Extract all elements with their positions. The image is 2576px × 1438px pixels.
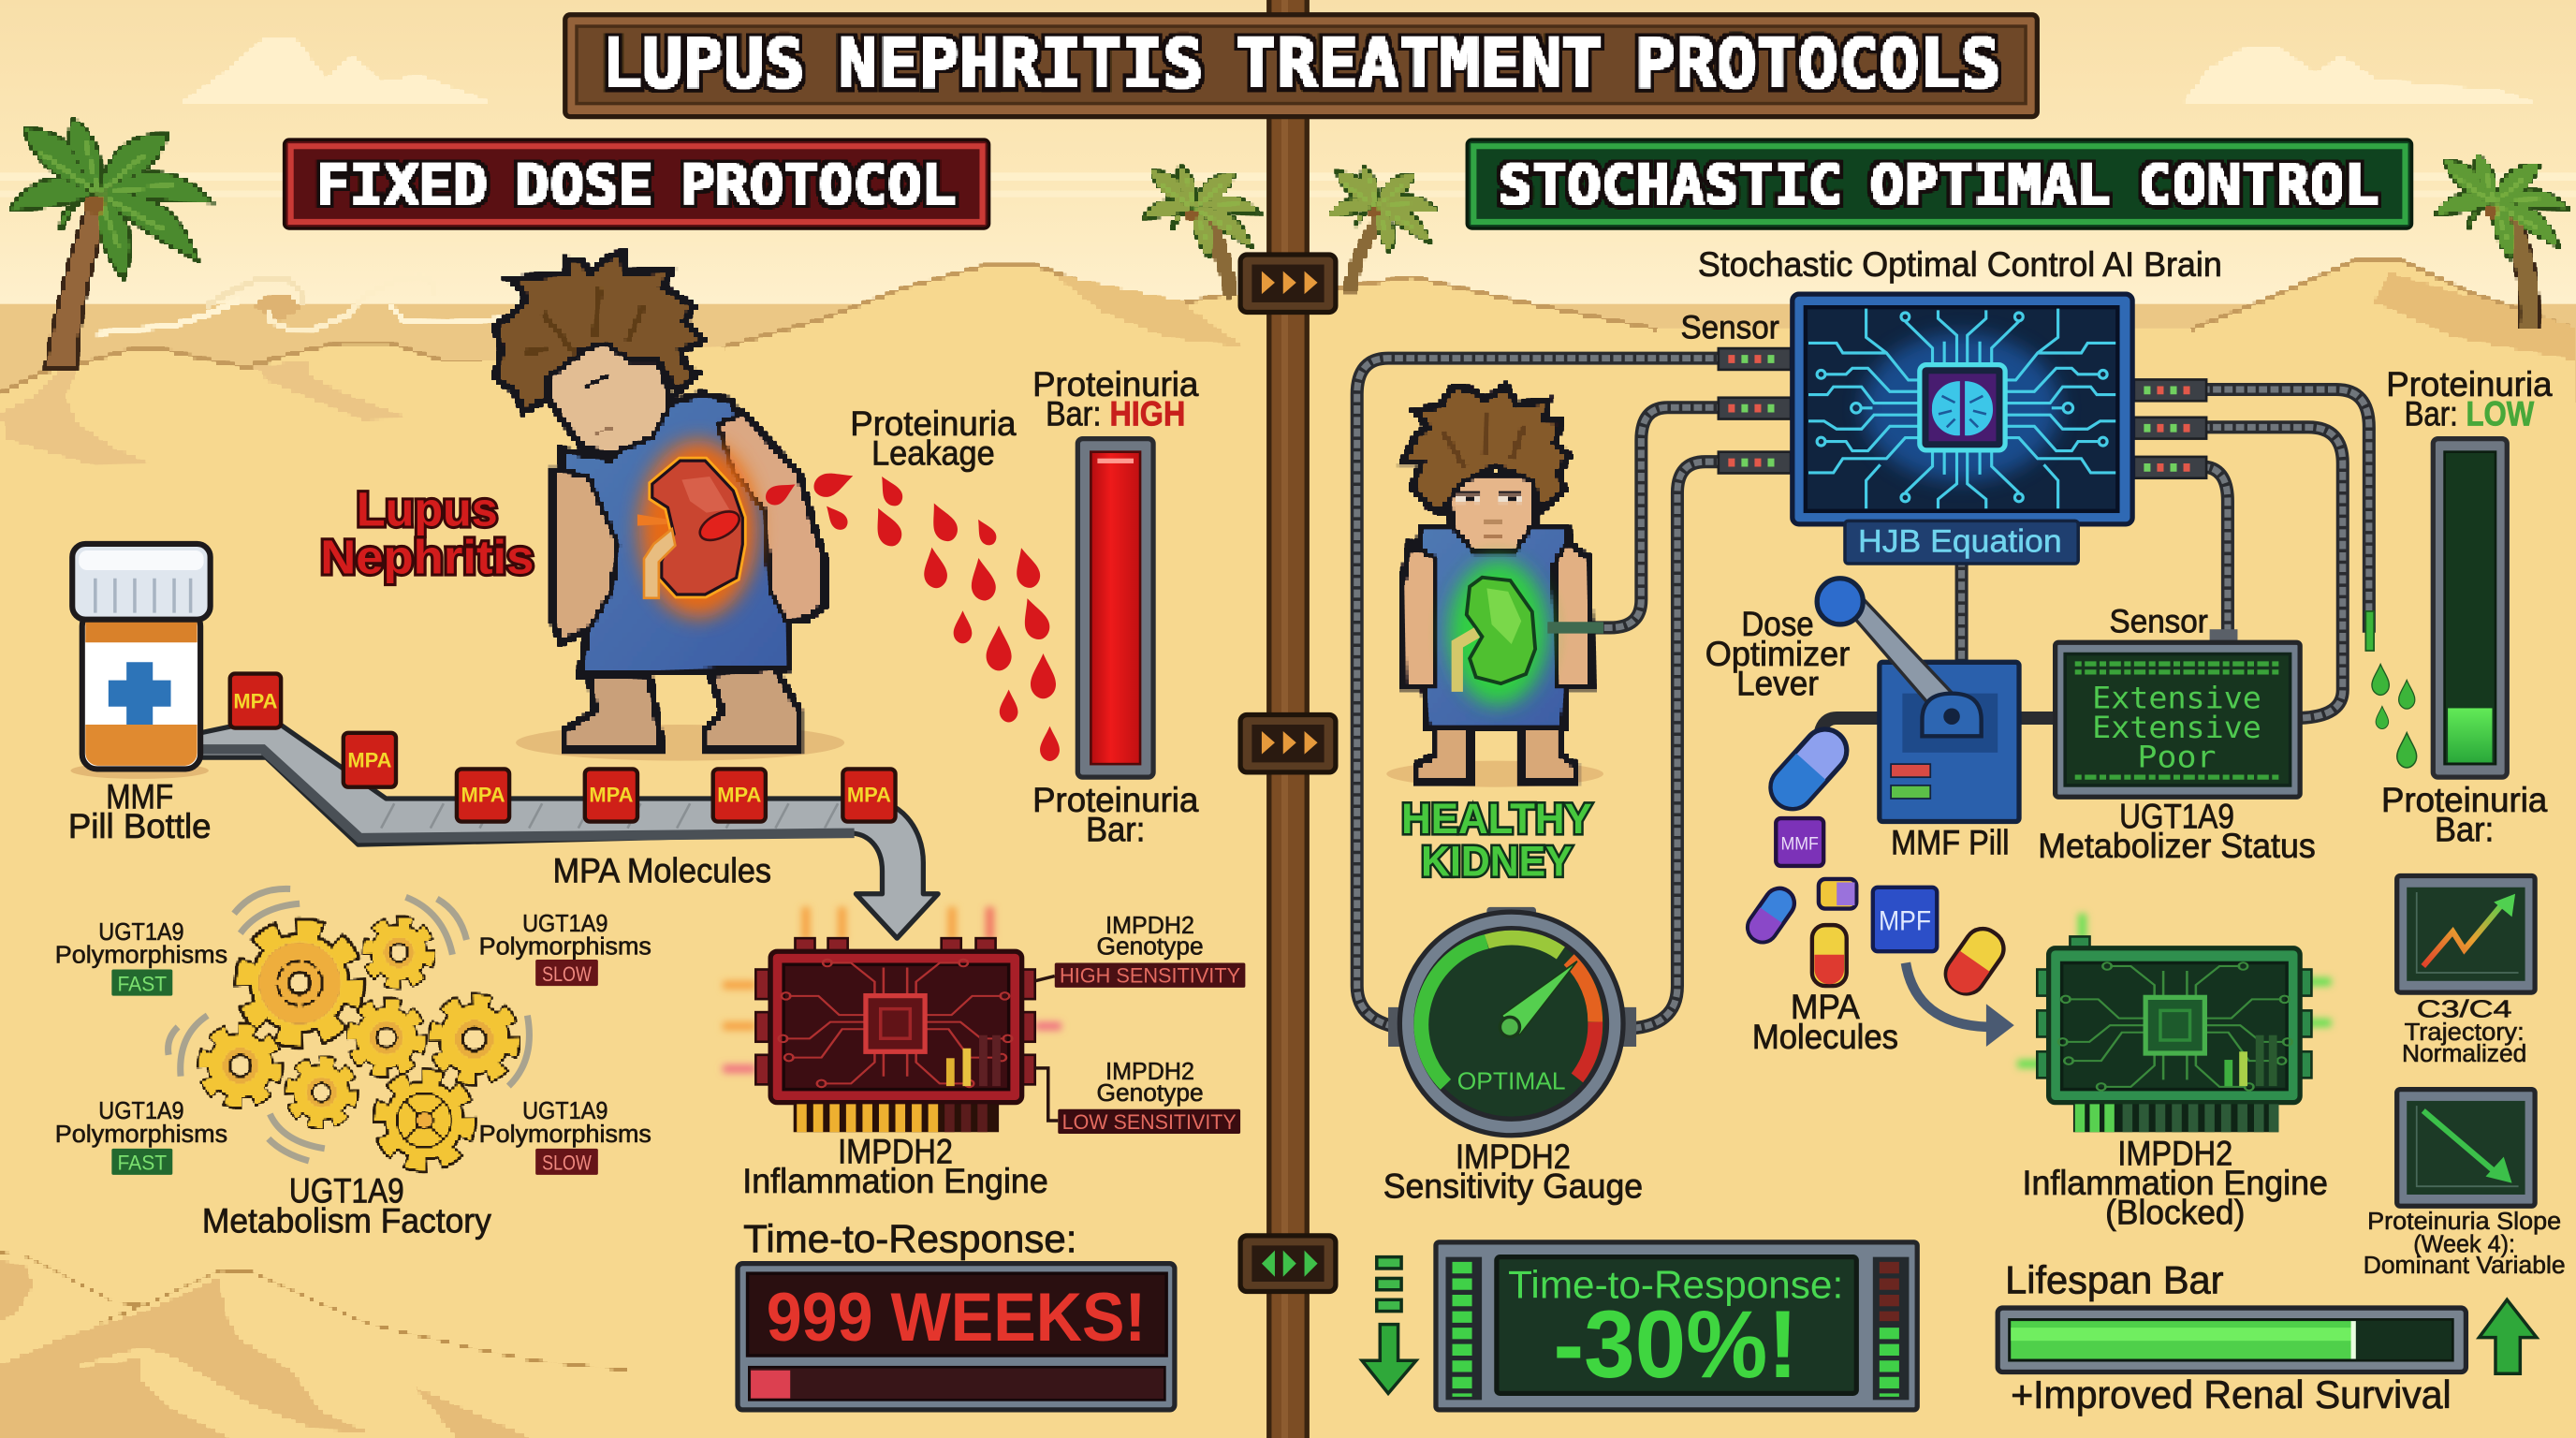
label: proteinuria leakage: Leakage — [871, 434, 995, 473]
label: lower sensor: Sensor — [2110, 604, 2208, 640]
MMF pill bottle icon — [70, 544, 211, 779]
MPA molecules on the conveyor: MPA — [589, 783, 634, 806]
label: IMPDH2 inflammation engine: Inflammation Engine — [742, 1162, 1048, 1200]
chart: proteinuria slope — [2397, 1090, 2535, 1206]
palm tree: large left — [10, 120, 212, 368]
label: proteinuria bar low — [2386, 365, 2553, 433]
polymorphism callout: slow top right: UGT1A9 — [522, 909, 607, 937]
label: proteinuria bar low: Bar: LOW — [2405, 395, 2534, 433]
label: MPA molecules right — [1752, 988, 1898, 1056]
label: metabolizer status — [2038, 798, 2316, 865]
label: proteinuria bar: Proteinuria — [1032, 781, 1199, 819]
heading: stochastic optimal control — [1467, 139, 2411, 228]
label: proteinuria leakage: Proteinuria — [850, 404, 1017, 443]
label: sensitivity gauge: Sensitivity Gauge — [1383, 1167, 1643, 1205]
polymorphism callout: fast top left: Polymorphisms — [55, 940, 227, 968]
heading: stochastic optimal control: STOCHASTIC OPTIMAL CONTROL — [1499, 154, 2378, 217]
label: lupus nephritis: Nephritis — [320, 531, 534, 584]
arrow to blocked engine — [1906, 962, 2014, 1047]
polymorphism callout: fast bottom left: FAST — [117, 1152, 167, 1175]
dose optimizer lever — [1817, 579, 2019, 822]
label: proteinuria leakage — [850, 404, 1017, 473]
label: blocked engine: (Blocked) — [2105, 1194, 2245, 1232]
healthy patient character — [1386, 387, 1603, 787]
label: dose optimizer lever: Optimizer — [1705, 635, 1850, 673]
label: improved renal survival: +Improved Renal Survival — [2011, 1372, 2452, 1416]
genotype callout: high sensitivity: IMPDH2 — [1105, 911, 1194, 939]
down arrow — [1362, 1257, 1416, 1393]
label: C3/C4 trajectory — [2402, 994, 2526, 1067]
HJB equation tag: HJB Equation — [1858, 524, 2062, 560]
centre wooden post — [1266, 0, 1310, 1438]
IMPDH2 inflammation engine green — [2017, 914, 2331, 1132]
IMPDH2 sensitivity gauge: OPTIMAL — [1457, 1067, 1566, 1095]
label: blocked engine: IMPDH2 — [2117, 1134, 2232, 1172]
polymorphism callout: slow bottom right — [479, 1096, 651, 1175]
label: proteinuria bar right: Bar: — [2435, 811, 2494, 849]
lifespan bar — [1998, 1308, 2466, 1372]
MPA molecules on the conveyor: MPA — [233, 689, 278, 712]
post connector bottom — [1240, 1236, 1336, 1292]
genotype callout: high sensitivity — [1035, 911, 1245, 988]
polymorphism callout: fast bottom left: UGT1A9 — [98, 1096, 184, 1124]
genotype callout: low sensitivity: LOW SENSITIVITY — [1062, 1110, 1237, 1134]
UGT1A9 metabolizer monitor: Extensive — [2092, 682, 2261, 715]
label: proteinuria bar: Bar: — [1086, 811, 1145, 849]
polymorphism callout: slow top right: SLOW — [542, 962, 592, 986]
label: proteinuria bar right — [2381, 781, 2548, 849]
proteinuria bar high — [1077, 439, 1153, 777]
HJB equation tag — [1845, 521, 2078, 564]
polymorphism callout: fast bottom left — [55, 1096, 227, 1175]
label: MPA molecules right: Molecules — [1752, 1018, 1898, 1056]
label: metabolizer status: Metabolizer Status — [2038, 827, 2316, 865]
MPA molecules on the conveyor: MPA — [847, 783, 891, 806]
label: metabolizer status: UGT1A9 — [2119, 798, 2234, 836]
title plaque: LUPUS NEPHRITIS TREATMENT PROTOCOLS — [601, 24, 2001, 103]
MPA and MPF molecules — [1742, 879, 2011, 1001]
label: healthy kidney: KIDNEY — [1421, 837, 1573, 885]
MMF capsule and tablet — [1763, 721, 1855, 866]
IMPDH2 sensitivity gauge — [1388, 907, 1636, 1136]
label: proteinuria bar high — [1032, 365, 1199, 433]
time-to-response panel: 999 weeks: 999 WEEKS! — [767, 1278, 1146, 1356]
label: MMF pill bottle: Pill Bottle — [68, 807, 212, 845]
conveyor belt and arrow — [200, 718, 938, 938]
label: sensitivity gauge — [1383, 1137, 1643, 1205]
MPA molecules on the conveyor: MPA — [717, 783, 762, 806]
label: AI brain: Stochastic Optimal Control AI Brain — [1698, 245, 2222, 284]
label: MPA molecules: MPA Molecules — [553, 851, 771, 889]
AI brain panel — [1719, 294, 2206, 524]
palm tree: large right — [2436, 155, 2569, 329]
genotype callout: high sensitivity: HIGH SENSITIVITY — [1060, 964, 1240, 988]
label: C3/C4 trajectory: Normalized — [2402, 1039, 2526, 1067]
label: MMF pill bottle: MMF — [106, 778, 173, 816]
label: proteinuria bar high: Proteinuria — [1032, 365, 1199, 404]
label: dose optimizer lever: Lever — [1736, 664, 1819, 702]
label: healthy kidney — [1401, 795, 1592, 885]
genotype callout: high sensitivity: Genotype — [1097, 932, 1204, 961]
label: metabolism factory — [202, 1172, 491, 1240]
up arrow — [2479, 1299, 2537, 1373]
label: MMF pill: MMF Pill — [1891, 824, 2009, 862]
label: C3/C4 trajectory: Trajectory: — [2405, 1018, 2525, 1046]
label: metabolism factory: UGT1A9 — [289, 1172, 404, 1211]
label: proteinuria slope: Proteinuria Slope — [2367, 1207, 2561, 1235]
polymorphism callout: slow bottom right: Polymorphisms — [479, 1120, 651, 1148]
label: proteinuria slope: (Week 4): — [2413, 1229, 2515, 1257]
label: proteinuria slope: Dominant Variable — [2364, 1251, 2566, 1279]
genotype callout: low sensitivity — [1035, 1057, 1240, 1134]
label: lupus nephritis: Lupus — [357, 483, 498, 536]
sick patient character — [496, 254, 844, 761]
polymorphism callout: fast bottom left: Polymorphisms — [55, 1120, 227, 1148]
proteinuria leakage drops — [762, 465, 1060, 761]
label: dose optimizer lever — [1705, 605, 1850, 702]
label: time-to-response left: Time-to-Response: — [743, 1216, 1076, 1260]
label: MPA molecules right: MPA — [1791, 988, 1860, 1026]
polymorphism callout: fast top left: FAST — [117, 972, 167, 995]
chart: C3/C4 trajectory — [2397, 875, 2535, 992]
polymorphism callout: fast top left — [55, 917, 227, 996]
IMPDH2 inflammation engine red — [723, 907, 1061, 1132]
genotype callout: low sensitivity: Genotype — [1097, 1078, 1204, 1107]
heading: fixed dose protocol: FIXED DOSE PROTOCOL — [315, 154, 956, 217]
MMF capsule and tablet: MMF — [1781, 834, 1819, 854]
UGT1A9 metabolizer monitor: Poor — [2137, 741, 2217, 775]
time-to-response panel: 999 weeks — [738, 1264, 1175, 1410]
polymorphism callout: slow top right: Polymorphisms — [479, 932, 651, 961]
label: dose optimizer lever: Dose — [1741, 605, 1814, 643]
label: proteinuria slope — [2364, 1207, 2566, 1279]
sensor cables — [1357, 359, 2369, 1029]
label: lifespan bar: Lifespan Bar — [2005, 1257, 2224, 1301]
label: IMPDH2 inflammation engine — [742, 1133, 1048, 1200]
green protein drops — [2365, 611, 2417, 768]
UGT1A9 gears — [168, 888, 529, 1163]
label: MMF pill bottle — [68, 778, 212, 845]
UGT1A9 metabolizer monitor: Extensive — [2092, 712, 2261, 745]
genotype callout: low sensitivity: IMPDH2 — [1105, 1057, 1194, 1085]
MPA molecules on the conveyor: MPA — [347, 749, 392, 772]
label: metabolism factory: Metabolism Factory — [202, 1201, 491, 1240]
label: proteinuria bar low: Proteinuria — [2386, 365, 2553, 404]
label: lupus nephritis — [320, 483, 534, 584]
UGT1A9 metabolizer monitor — [2056, 629, 2300, 797]
time-to-response panel: -30%: Time-to-Response: — [1508, 1263, 1843, 1307]
label: proteinuria bar — [1032, 781, 1199, 849]
palm tree: small centre left — [1143, 166, 1260, 299]
heading: fixed dose protocol — [285, 139, 989, 228]
MPA molecules on the conveyor: MPA — [461, 783, 505, 806]
label: top sensor: Sensor — [1680, 310, 1779, 346]
label: healthy kidney: HEALTHY — [1401, 795, 1592, 843]
polymorphism callout: slow bottom right: UGT1A9 — [522, 1096, 607, 1124]
MPA molecules on the conveyor — [230, 674, 896, 822]
time-to-response panel: -30%: -30%! — [1553, 1291, 1798, 1398]
MPA and MPF molecules: MPF — [1879, 905, 1931, 936]
polymorphism callout: fast top left: UGT1A9 — [98, 917, 184, 946]
palm tree: small centre right — [1329, 167, 1438, 292]
label: blocked engine: Inflammation Engine — [2023, 1164, 2328, 1202]
label: C3/C4 trajectory: C3/C4 — [2417, 994, 2512, 1022]
polymorphism callout: slow top right — [479, 909, 651, 986]
label: IMPDH2 inflammation engine: IMPDH2 — [838, 1133, 953, 1171]
time-to-response panel: -30% — [1436, 1242, 1917, 1410]
label: sensitivity gauge: IMPDH2 — [1456, 1137, 1571, 1176]
label: proteinuria bar high: Bar: HIGH — [1046, 395, 1185, 433]
label: proteinuria bar right: Proteinuria — [2381, 781, 2548, 819]
post connector middle — [1240, 714, 1336, 772]
post connector top — [1240, 255, 1336, 312]
polymorphism callout: slow bottom right: SLOW — [542, 1152, 592, 1175]
proteinuria bar low — [2433, 439, 2507, 777]
label: blocked engine — [2023, 1134, 2328, 1232]
